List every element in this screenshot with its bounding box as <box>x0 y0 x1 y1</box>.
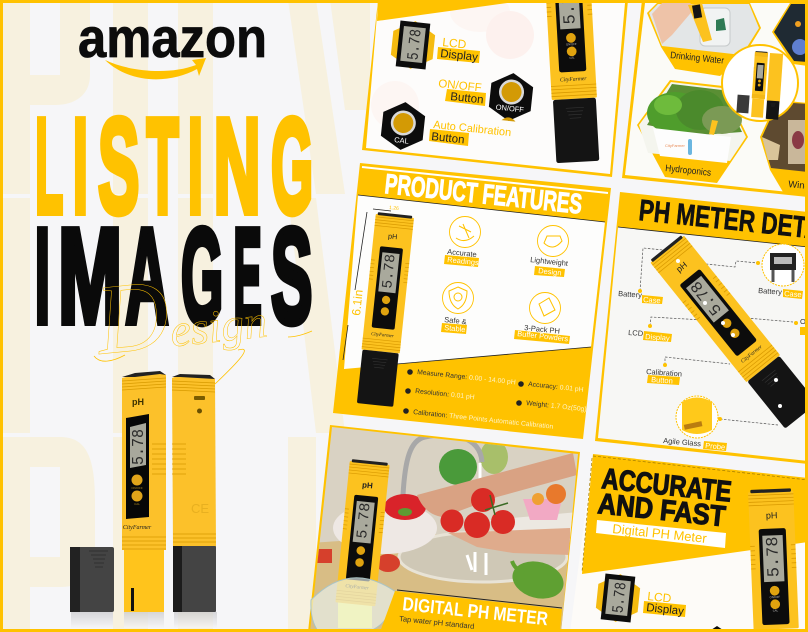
CAL hexagon: CAL <box>394 135 409 146</box>
pH meter: CAL <box>773 608 779 613</box>
back meter <box>172 374 216 612</box>
ON/OFF hexagon <box>488 71 534 123</box>
pH meter: 5.78 <box>764 536 785 578</box>
LCD display label: Display <box>645 332 670 343</box>
upper arm <box>417 453 577 517</box>
front meter: CAL <box>134 502 140 506</box>
feature: accurate readings: Readings <box>447 255 479 267</box>
meter with dimension <box>343 205 414 407</box>
pH meter: ON/OFF <box>770 595 781 599</box>
title: LISTING: L <box>35 90 63 242</box>
pH meter with cap: ON/OFF <box>566 42 577 47</box>
kitchen counter <box>310 525 578 632</box>
battery cell circle <box>762 244 804 286</box>
panel: accurate and fast <box>570 454 808 632</box>
angled pH meter <box>649 234 808 429</box>
subheading bar: Digital PH Meter <box>612 521 708 546</box>
green pepper <box>510 560 564 599</box>
angled pH meter: CityFarmer <box>740 344 764 365</box>
product: back meter, front meter and cap photo <box>70 371 217 628</box>
battery case right label: Case <box>784 289 802 299</box>
subheading bar <box>596 520 726 548</box>
yellow caption band <box>380 591 562 632</box>
front meter: CityFarmer <box>123 525 152 531</box>
plant foliage <box>647 84 742 135</box>
spec: resolution: Resolution: 0.01 pH <box>415 388 475 401</box>
LCD Display label <box>643 589 686 618</box>
infographic canvas: G <box>271 90 313 242</box>
battery case right label <box>758 286 803 299</box>
pH meter: 5.78 <box>380 253 400 289</box>
Auto Calibration Button label: Auto Calibration <box>433 119 512 139</box>
battery case left label: Battery <box>618 289 642 300</box>
title: Design script: Design <box>89 248 271 376</box>
calibration button label: Button <box>651 375 673 386</box>
calibration button label: Calibration <box>646 367 682 378</box>
ON/OFF Button label: ON/OFF <box>438 78 482 95</box>
LCD display label <box>628 328 672 343</box>
title: LISTING: T <box>146 90 179 242</box>
spec: weight: Weight: 1.7 Oz(50g) <box>526 400 587 413</box>
LCD hexagon: 5.78 <box>609 581 631 614</box>
front meter: 5.78 <box>130 429 149 465</box>
ON/OFF hexagon: ON/OFF <box>495 102 525 114</box>
agile glass probe label: Agile Glass <box>663 436 702 448</box>
title: LISTING: I <box>188 90 203 242</box>
battery case left label <box>618 289 663 305</box>
panel: product features <box>333 163 611 439</box>
title: LISTING: S <box>98 90 139 242</box>
colander <box>333 511 437 554</box>
title: Design script <box>89 248 312 384</box>
right counter <box>490 512 578 540</box>
title: IMAGES: E <box>233 200 262 352</box>
yellow header <box>582 454 808 574</box>
feature: buffer powders: 3-Pack PH <box>524 323 560 336</box>
Hydroponics hexagon: CityFarmer <box>665 143 685 148</box>
title: IMAGES: A <box>126 200 168 352</box>
pH meter: pH <box>388 231 398 241</box>
panel: buttons overview <box>362 0 628 177</box>
title: IMAGES: M <box>58 200 122 352</box>
dashed edge <box>582 456 808 572</box>
feature: lightweight design: Design <box>538 266 562 277</box>
title: IMAGES: I <box>35 200 50 352</box>
spec: measure range: Measure Range: 0.00 - 14.00 pH <box>417 369 516 386</box>
Drinking Water hexagon <box>647 3 761 76</box>
probe in glass <box>338 602 372 628</box>
pH meter in water: CityFarmer <box>345 584 369 592</box>
fruit bowl <box>523 484 566 520</box>
faucet <box>403 435 482 495</box>
green leaves <box>439 440 508 485</box>
heading: accurate: ACCURATE <box>600 463 733 509</box>
amazon wordmark: amazon <box>78 6 267 69</box>
Wine hexagon <box>760 100 808 197</box>
amazon logo <box>78 6 267 79</box>
feature: lightweight design <box>530 226 569 277</box>
front meter: pH <box>132 397 144 407</box>
feature: buffer powders: Buffer Powders <box>517 329 569 343</box>
feature: safe and stable <box>441 282 474 334</box>
pH meter with cap <box>543 0 600 163</box>
carrots <box>312 549 400 572</box>
feature: lightweight design: Lightweight <box>530 255 569 268</box>
back meter: CE <box>191 501 209 516</box>
feature: accurate readings: Accurate <box>447 247 477 259</box>
on/off partial label <box>800 317 808 335</box>
pH meter <box>356 212 414 407</box>
LCD hexagon <box>390 19 436 71</box>
tomatoes <box>440 488 515 538</box>
infographic canvas: S <box>271 200 312 352</box>
feature: buffer powders <box>514 292 570 344</box>
background letter pattern <box>0 0 370 632</box>
battery case right label: Battery <box>758 286 782 297</box>
LCD Display label: LCD <box>647 589 672 606</box>
mini cap <box>736 95 750 113</box>
ON/OFF Button label: Button <box>450 91 484 106</box>
header black rule <box>618 227 808 247</box>
black cap <box>70 547 114 612</box>
front meter <box>122 371 166 612</box>
pH meter <box>748 488 799 630</box>
pH meter: pH <box>766 510 778 521</box>
mini meter front <box>750 51 768 118</box>
Hydroponics hexagon: Hydroponics <box>665 163 712 179</box>
feature: safe and stable: Safe & <box>444 315 467 326</box>
front meter: ON/OFF <box>131 486 143 490</box>
title: LISTING: I <box>73 90 88 242</box>
features white body <box>344 195 605 369</box>
sink <box>399 532 567 582</box>
lower arm and hand <box>448 528 570 555</box>
title: IMAGES: G <box>181 200 223 352</box>
panel: digital pH meter photo <box>308 425 580 632</box>
LCD hexagon: 5.78 <box>404 28 426 61</box>
pale background blobs <box>486 11 534 59</box>
diagonal black rule <box>397 347 591 364</box>
pH meter with cap: CityFarmer <box>560 76 588 83</box>
dimension label 1.26: 1.26 <box>389 205 399 212</box>
CAL hexagon tip <box>708 626 726 632</box>
panel: applications <box>622 0 808 197</box>
angled pH meter: pH <box>674 260 689 274</box>
Drinking Water hexagon: Drinking Water <box>670 50 725 67</box>
band black rule <box>397 590 562 608</box>
kitchen wall <box>310 427 578 555</box>
feature: safe and stable: Stable <box>444 323 466 334</box>
product reflections <box>71 612 217 628</box>
dimension line <box>343 209 391 360</box>
water stream <box>467 463 486 575</box>
angled pH meter: 5.78 <box>688 277 726 319</box>
header black rule <box>358 195 605 222</box>
agile glass probe label: Probe <box>705 441 726 452</box>
red pepper <box>384 494 426 520</box>
spec: calibration: Calibration: Three Points Automatic Calibration <box>413 409 554 431</box>
ON/OFF Button label <box>438 78 486 106</box>
product circle <box>722 45 798 121</box>
caption text: Tap water pH standard <box>399 614 475 631</box>
callout markers <box>638 259 798 421</box>
amazon smile arrow <box>105 58 206 79</box>
glass bowl <box>311 578 396 631</box>
top-right photo hexagon <box>772 3 808 66</box>
tomato vine <box>485 495 508 515</box>
pH meter in water: 5.78 <box>354 502 375 540</box>
header stripes <box>362 167 608 193</box>
LCD Display label: LCD <box>442 35 467 52</box>
LCD Display label: Display <box>440 48 479 64</box>
LCD Display label: Display <box>646 602 685 618</box>
agile glass probe label <box>663 436 727 452</box>
mini meter back <box>765 53 783 120</box>
Hydroponics hexagon <box>637 80 748 183</box>
pH meter in water: pH <box>362 480 373 490</box>
title: LISTING: N <box>214 90 261 242</box>
yellow corner header <box>377 3 507 21</box>
CAL hexagon <box>380 100 426 152</box>
Auto Calibration Button label: Button <box>431 131 465 146</box>
LCD hexagon <box>595 572 641 624</box>
pH meter with cap: CAL <box>569 56 575 60</box>
feature: accurate readings <box>444 216 480 267</box>
pH meter: CityFarmer <box>371 332 394 339</box>
calibration button label <box>646 367 682 386</box>
heading: and fast: AND FAST <box>596 488 727 533</box>
battery case left label: Case <box>643 295 661 305</box>
dimension label 6.1in: 6.1in <box>349 289 366 316</box>
heading: product features: PRODUCT FEATURES <box>383 168 584 220</box>
probe circle <box>676 396 718 438</box>
pH meter in water <box>335 459 390 606</box>
spec: accuracy: Accuracy: 0.01 pH <box>528 381 584 394</box>
leader lines <box>640 248 793 425</box>
on/off partial label: O <box>800 317 806 326</box>
panel: meter details <box>595 192 808 464</box>
LCD display label: LCD <box>628 328 644 338</box>
LCD Display label <box>437 35 480 64</box>
